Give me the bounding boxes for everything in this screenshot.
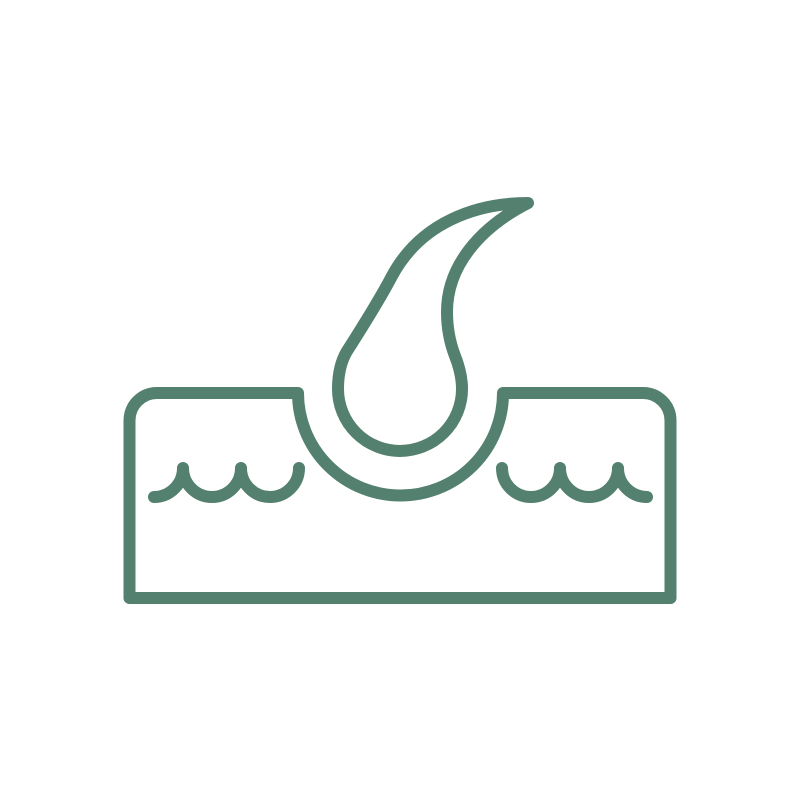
right skin wave xyxy=(502,468,647,497)
skin block with follicle cavity xyxy=(130,393,670,598)
left skin wave xyxy=(154,468,299,497)
hair strand and bulb xyxy=(338,203,528,451)
